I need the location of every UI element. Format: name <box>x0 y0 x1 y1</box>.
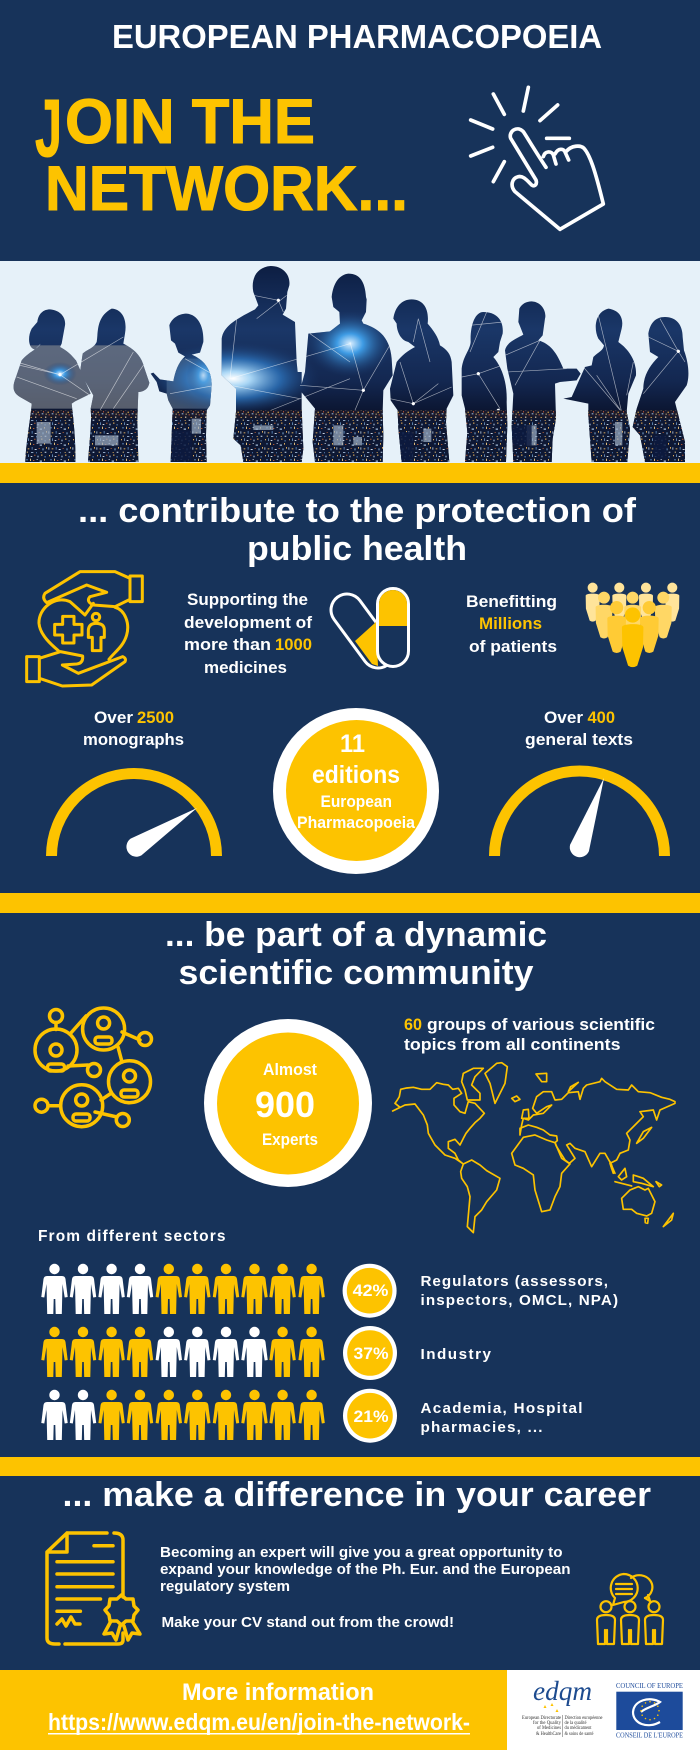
main title: NETWORK... <box>45 154 408 224</box>
logo: EDQM: du médicament <box>564 1726 592 1731</box>
panel: more information footer <box>0 1670 700 1750</box>
icon: people discussing <box>597 1574 663 1644</box>
main title: OIN THE <box>65 87 315 157</box>
gauge: general texts: general texts <box>525 730 633 749</box>
badge: 900 experts: 900 <box>255 1084 315 1125</box>
gauge: monographs: Over <box>94 708 133 727</box>
heading: ... contribute to the protection of <box>78 492 637 530</box>
icon: crowd of people <box>586 583 679 667</box>
pictogram row: industry <box>41 1326 492 1380</box>
logo: Council of Europe <box>616 1681 683 1740</box>
gauge: general texts: 400 <box>588 708 615 727</box>
heading: public health <box>247 530 467 568</box>
icon: caring hands with heart <box>27 572 142 686</box>
logo: EDQM: European Directorate <box>522 1716 561 1721</box>
text: supporting medicines: more than <box>184 635 271 654</box>
text: career benefit <box>160 1544 570 1631</box>
world map <box>393 1063 675 1233</box>
text: career benefit: regulatory system <box>160 1578 290 1595</box>
badge: 11 editions: editions <box>312 761 400 789</box>
pictogram row: academia: 21% <box>354 1407 388 1426</box>
icon: capsules <box>347 588 408 666</box>
heading: scientific community <box>178 954 534 992</box>
badge: 11 editions: Pharmacopoeia <box>297 813 416 832</box>
text: supporting medicines: Supporting the <box>187 590 308 609</box>
panel: team photo band <box>0 261 700 464</box>
icon: clicking hand <box>471 87 603 229</box>
main title: J <box>35 83 62 174</box>
heading: ... make a difference in your career <box>62 1476 651 1514</box>
logo: EDQM: Direction européenne <box>564 1716 602 1721</box>
badge: 900 experts: Experts <box>262 1130 318 1149</box>
logo: EDQM: of Medicines <box>537 1726 561 1731</box>
pictogram row: academia: Academia, Hospital <box>420 1400 582 1417</box>
link: https://www.edqm.eu/en/join-the-network- <box>48 1709 470 1735</box>
pictogram row: regulators: inspectors, OMCL, NPA) <box>420 1292 618 1309</box>
supertitle: EUROPEAN PHARMACOPOEIA <box>112 18 602 55</box>
yellow divider <box>0 463 700 483</box>
badge: 11 editions: European <box>320 792 392 811</box>
logo: Council of Europe: CONSEIL DE L'EUROPE <box>616 1730 683 1740</box>
text: career benefit: expand your knowledge of the Ph. Eur. and the European <box>160 1561 570 1578</box>
badge: 11 editions <box>273 708 439 874</box>
text: more information: More information <box>182 1679 374 1706</box>
pictogram row: industry: 37% <box>354 1344 388 1363</box>
text: benefitting millions: Millions <box>479 614 542 633</box>
gauge: general texts: Over <box>544 708 583 727</box>
logo: EDQM: for the Quality <box>533 1721 562 1726</box>
main title <box>35 83 408 224</box>
logo: EDQM: & soins de santé <box>564 1732 594 1737</box>
pictogram row: regulators: Regulators (assessors, <box>420 1273 608 1290</box>
logo: EDQM: edqm <box>533 1676 592 1706</box>
yellow divider <box>0 893 700 913</box>
heading: ... be part of a dynamic <box>165 916 547 954</box>
text: from different sectors: From different sectors <box>38 1228 226 1245</box>
panel: contribute to public health <box>27 492 679 874</box>
badge: 11 editions: 11 <box>340 730 365 758</box>
text: benefitting millions <box>466 592 557 656</box>
pictogram row: academia <box>41 1389 583 1443</box>
text: career benefit: Make your CV stand out from the crowd! <box>162 1614 454 1631</box>
gauge: monographs <box>52 708 216 857</box>
text: supporting medicines: development of <box>184 613 312 632</box>
pictogram row: regulators: 42% <box>353 1281 388 1300</box>
gauge: general texts <box>494 708 664 857</box>
icon: expert network <box>35 1008 152 1127</box>
badge: 900 experts: Almost <box>263 1060 317 1079</box>
gauge: monographs: 2500 <box>137 708 174 727</box>
text: supporting medicines <box>184 590 312 677</box>
text: 60 groups: 60 <box>404 1015 422 1034</box>
pictogram row: industry: Industry <box>420 1346 492 1363</box>
gauge: monographs: monographs <box>83 730 184 749</box>
silhouettes of professionals <box>0 262 700 464</box>
text: career benefit: Becoming an expert will give you a great opportunity to <box>160 1544 562 1561</box>
text: supporting medicines: 1000 <box>275 635 312 654</box>
text: supporting medicines: medicines <box>204 658 287 677</box>
logo: EDQM: de la qualité <box>564 1721 586 1726</box>
pictogram row: regulators <box>41 1264 618 1318</box>
text: benefitting millions: of patients <box>469 637 557 656</box>
badge: 900 experts <box>204 1019 372 1187</box>
yellow divider <box>0 1457 700 1476</box>
text: 60 groups: groups of various scientific <box>427 1015 655 1034</box>
logo: EDQM: & HealthCare <box>536 1732 561 1737</box>
logo: Council of Europe: COUNCIL OF EUROPE <box>616 1681 683 1690</box>
icon: certificate <box>47 1533 140 1644</box>
text: 60 groups <box>404 1015 655 1054</box>
logo: EDQM <box>522 1676 602 1737</box>
heading <box>78 492 637 568</box>
heading <box>165 916 547 992</box>
panel: header <box>35 18 603 229</box>
panel: scientific community <box>35 916 675 1443</box>
pictogram row: academia: pharmacies, ... <box>420 1419 542 1436</box>
text: 60 groups: topics from all continents <box>404 1035 620 1054</box>
text: benefitting millions: Benefitting <box>466 592 557 611</box>
panel: career <box>47 1476 663 1644</box>
